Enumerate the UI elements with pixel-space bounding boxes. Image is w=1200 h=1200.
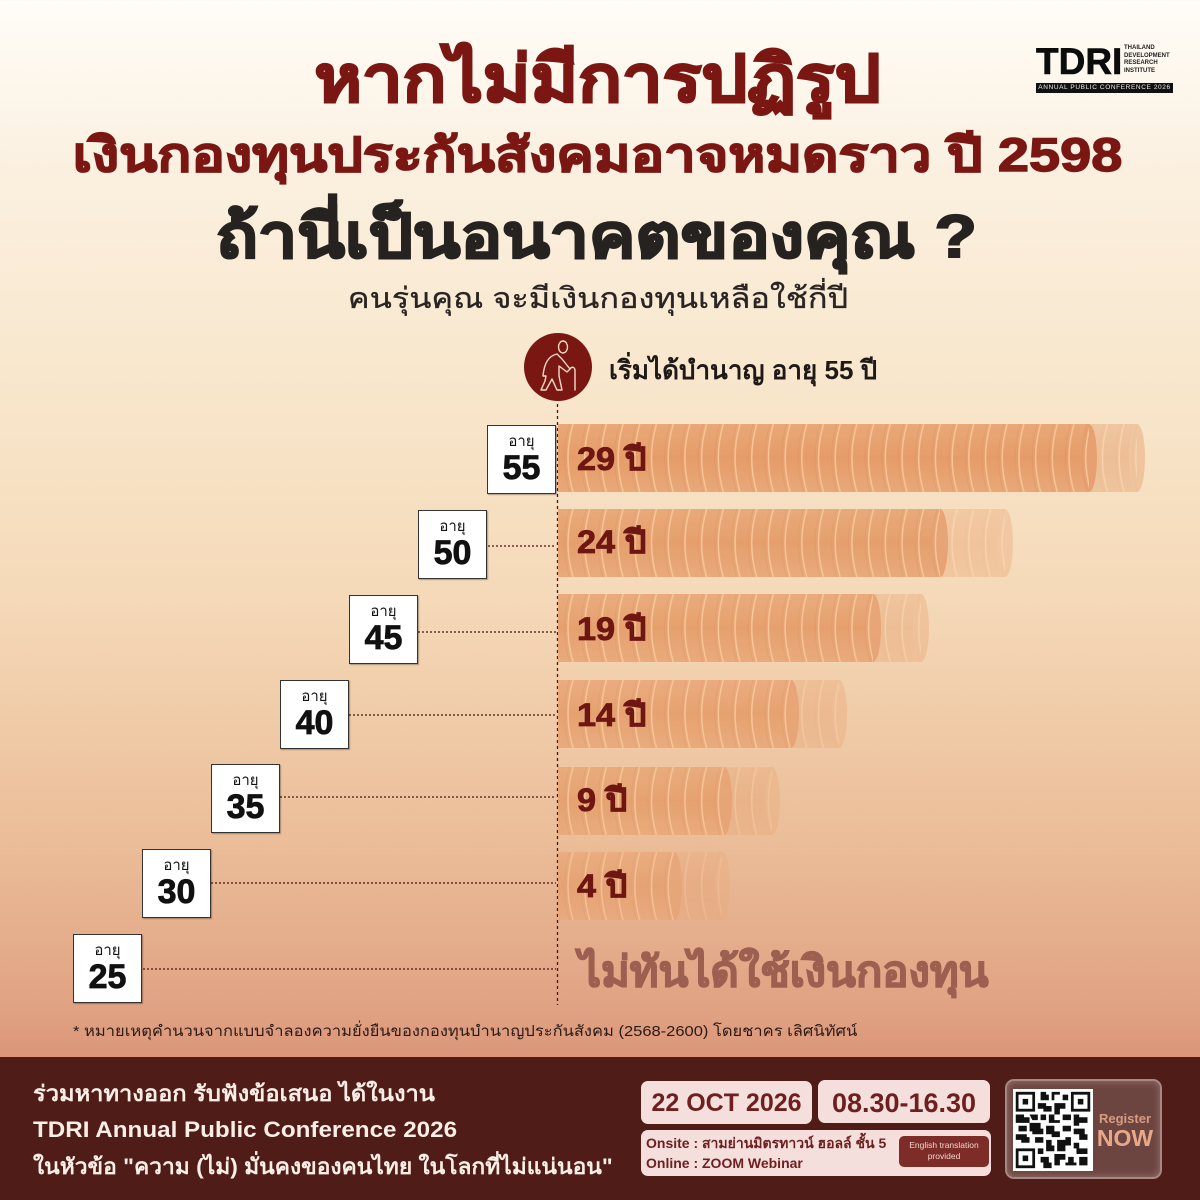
logo: TDRI: ANNUAL PUBLIC CONFERENCE 2026 xyxy=(1038,84,1171,91)
value: 4 years: 4 ปี xyxy=(577,868,627,904)
age box 50: 50 xyxy=(434,534,471,572)
icon: elderly person with cane xyxy=(524,333,592,401)
dotted connectors: ages xyxy=(143,546,556,969)
bar: age 35, 9 years xyxy=(558,767,780,835)
date pill: 22 OCT 2026 xyxy=(651,1089,802,1117)
footer text: invitation: ในหัวข้อ "ความ (ไม่) มั่นคงของคนไทย ในโลกที่ไม่แน่นอน" xyxy=(33,1154,613,1179)
age box 40: 40 xyxy=(296,704,333,742)
label: pension starts at 55: เริ่มได้บำนาญ อายุ 55 ปี xyxy=(609,355,877,385)
bar: age 40, 14 years xyxy=(558,680,847,748)
logo: TDRI xyxy=(1036,41,1173,93)
time pill: 08.30-16.30 xyxy=(832,1088,976,1118)
bar: age 55, 29 years xyxy=(558,424,1145,492)
age box 35: 35 xyxy=(227,788,264,826)
time pill xyxy=(818,1080,990,1123)
age box 45: 45 xyxy=(365,619,402,657)
venue text: Online : ZOOM Webinar xyxy=(646,1155,803,1171)
logo: TDRI: TDRI xyxy=(1036,41,1122,82)
age box 55 xyxy=(487,425,556,494)
bar: age 30, 4 years xyxy=(558,852,730,920)
value: 14 years: 14 ปี xyxy=(577,697,646,733)
age box 30 xyxy=(142,849,211,918)
age box 25: 25 xyxy=(89,958,126,996)
register text: Register xyxy=(1099,1111,1151,1126)
footer band xyxy=(0,1057,1200,1200)
register text: NOW xyxy=(1097,1125,1153,1151)
dotted connector: retirement axis xyxy=(556,398,558,1005)
value: 9 years: 9 ปี xyxy=(577,782,627,818)
title: main heading line 1: หากไม่มีการปฏิรูป xyxy=(314,43,881,115)
value: 19 years: 19 ปี xyxy=(577,611,646,647)
footnote: * หมายเหตุคำนวนจากแบบจำลองความยั่งยืนของกองทุนบำนาญประกันสังคม (2568-2600) โดยชาคร เลิศนิทัศน์ xyxy=(73,1023,857,1040)
age box 35 xyxy=(211,764,280,833)
age box 45 xyxy=(349,595,418,664)
age box 40: อายุ xyxy=(301,688,328,705)
logo: TDRI: DEVELOPMENT xyxy=(1124,53,1170,59)
footer text: invitation: ร่วมหาทางออก รับฟังข้อเสนอ ได้ในงาน xyxy=(33,1081,435,1106)
age box 30: 30 xyxy=(158,873,195,911)
footer text: invitation: TDRI Annual Public Conference 2026 xyxy=(33,1117,457,1142)
value: 29 years: 29 ปี xyxy=(577,441,646,477)
age box 40 xyxy=(280,680,349,749)
venue text xyxy=(646,1132,886,1171)
footer text: invitation xyxy=(33,1080,613,1179)
translation badge: provided xyxy=(928,1151,960,1161)
bar: age 50, 24 years xyxy=(558,509,1013,577)
logo: TDRI: RESEARCH xyxy=(1124,60,1158,66)
value: too late for the fund: ไม่ทันได้ใช้เงินกองทุน xyxy=(579,948,988,995)
age box 50 xyxy=(418,510,487,579)
age box 25 xyxy=(73,934,142,1003)
date pill xyxy=(641,1081,812,1124)
venue text: Onsite : สามย่านมิตรทาวน์ ฮอลล์ ชั้น 5 xyxy=(646,1135,886,1151)
age box 30: อายุ xyxy=(163,857,190,874)
subtitle: คนรุ่นคุณ จะมีเงินกองทุนเหลือใช้กี่ปี xyxy=(348,283,848,315)
age box 25: อายุ xyxy=(94,942,121,959)
bar: age 45, 19 years xyxy=(558,594,929,662)
register panel xyxy=(1005,1079,1162,1179)
QR code xyxy=(1013,1089,1093,1171)
age box 55: 55 xyxy=(503,449,540,487)
age box 55: อายุ xyxy=(508,433,535,450)
age box 50: อายุ xyxy=(439,518,466,535)
value: 24 years: 24 ปี xyxy=(577,524,646,560)
translation badge: English translation xyxy=(909,1140,979,1150)
translation badge xyxy=(899,1136,989,1167)
title: main heading line 2: เงินกองทุนประกันสังคมอาจหมดราว ปี 2598 xyxy=(73,128,1122,181)
register text xyxy=(1097,1111,1153,1151)
logo: TDRI: THAILAND xyxy=(1124,45,1155,51)
title: question heading: ถ้านี่เป็นอนาคตของคุณ ? xyxy=(216,203,977,270)
logo: TDRI: INSTITUTE xyxy=(1124,68,1155,74)
venue panel xyxy=(641,1130,991,1176)
age box 35: อายุ xyxy=(232,772,259,789)
age box 45: อายุ xyxy=(370,603,397,620)
